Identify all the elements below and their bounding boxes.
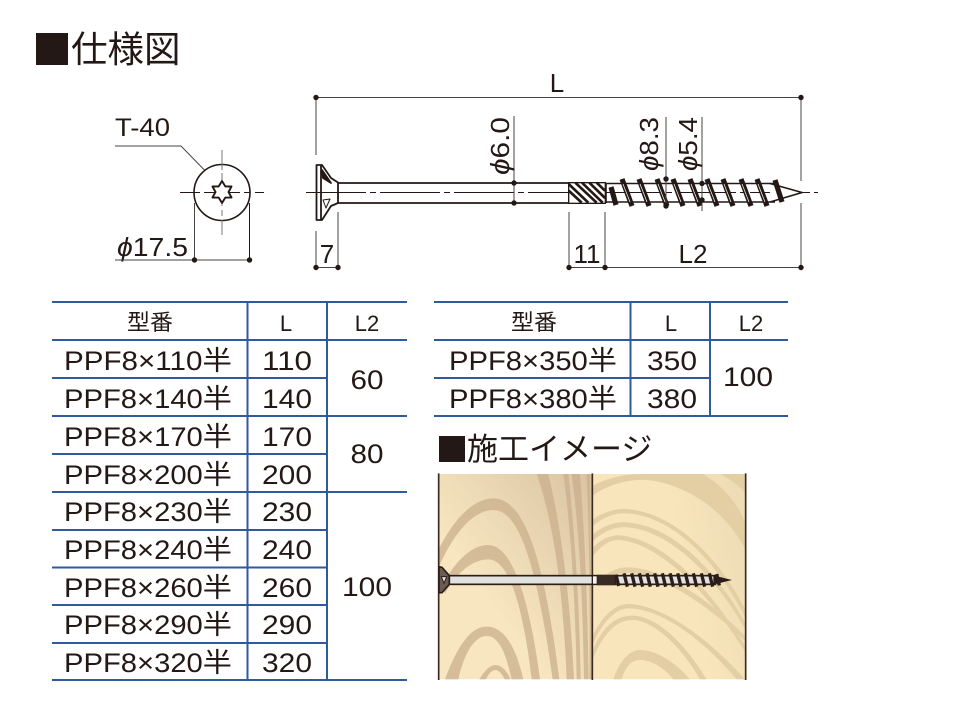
label: L2: L2 (679, 239, 707, 269)
table header: L (665, 311, 677, 336)
label: phi 6.0: ϕ6.0 (485, 117, 515, 175)
table rows: 380 (647, 384, 697, 414)
label: 11: 11 (574, 239, 600, 269)
diagram: screw side view (306, 68, 818, 270)
dimension: phi 5.4 (699, 117, 705, 211)
label: phi 5.4: ϕ5.4 (673, 117, 703, 171)
table: left spec table (52, 302, 407, 680)
table rows: PPF8×110半 (64, 346, 232, 376)
torx recess icon (212, 181, 232, 203)
table rows: PPF8×290半 (64, 610, 232, 640)
table rows: 240 (262, 535, 312, 565)
table header: 型番 (511, 310, 557, 335)
table rows: PPF8×170半 (64, 422, 232, 452)
table rows: 100 (723, 362, 773, 392)
left timber (438, 474, 592, 679)
table rows: 230 (262, 497, 312, 527)
screw centre line (306, 192, 818, 194)
table rows: PPF8×140半 (64, 384, 232, 414)
leader line (115, 146, 219, 185)
table header (127, 310, 379, 336)
table rows: PPF8×320半 (64, 648, 232, 678)
screw tip (770, 184, 802, 202)
table header: L (280, 311, 292, 336)
threaded core (615, 576, 715, 584)
thread core (606, 183, 775, 203)
label: phi 8.3: ϕ8.3 (634, 117, 664, 171)
label: phi 17.5: ϕ17.5 (117, 232, 188, 262)
dimension: phi 6.0 (511, 116, 517, 206)
screw threads (611, 179, 782, 206)
table rows: 200 (262, 460, 312, 490)
heading: installation image: 施工イメージ (467, 432, 652, 467)
screw head circle (194, 164, 250, 220)
thread highlights (623, 184, 765, 202)
dimension: L (313, 95, 804, 181)
table rules (434, 302, 788, 416)
label: 7: 7 (320, 239, 334, 269)
screw head (316, 165, 338, 220)
timber edge lines (439, 473, 746, 680)
table rows: PPF8×240半 (64, 535, 232, 565)
table header: L2 (355, 311, 379, 336)
installed screw (439, 567, 732, 593)
table rows (64, 346, 392, 678)
table rows: PPF8×380半 (449, 384, 617, 414)
table rows: 170 (262, 422, 312, 452)
table rows: 60 (350, 365, 384, 395)
table rows: 320 (262, 648, 312, 678)
dimension: phi 17.5 (115, 203, 252, 263)
dimension: phi 8.3 (663, 117, 669, 209)
right timber (592, 474, 746, 679)
table rows: 260 (262, 573, 312, 603)
dimension: 7, 11, L2 (313, 203, 804, 270)
knurled section (569, 183, 605, 203)
table rows: PPF8×200半 (64, 460, 232, 490)
table header: 型番 (127, 310, 173, 335)
table rows: PPF8×350半 (449, 346, 617, 376)
label: T-40: T-40 (115, 114, 170, 142)
table rows: PPF8×260半 (64, 573, 232, 603)
table rows (449, 346, 773, 414)
table header (511, 310, 763, 336)
tip (713, 575, 732, 585)
centre lines (180, 150, 264, 235)
illustration: screw joining two timbers (438, 473, 746, 680)
table rows: 290 (262, 610, 312, 640)
table rows: 80 (350, 439, 384, 469)
screw shank (338, 183, 568, 203)
table rows: 110 (262, 346, 312, 376)
table rows: 100 (342, 572, 392, 602)
table rows: PPF8×230半 (64, 497, 232, 527)
table: right spec table (434, 302, 788, 416)
label: L: L (550, 68, 564, 98)
shank (448, 576, 597, 584)
table rows: 140 (262, 384, 312, 414)
head (439, 567, 449, 593)
diagram: screw head front view (115, 114, 264, 263)
title: 仕様図 (71, 29, 180, 70)
table rules (52, 302, 407, 680)
threads (616, 573, 719, 587)
table header: L2 (739, 311, 763, 336)
knurl (597, 575, 615, 585)
table rows: 350 (647, 346, 697, 376)
